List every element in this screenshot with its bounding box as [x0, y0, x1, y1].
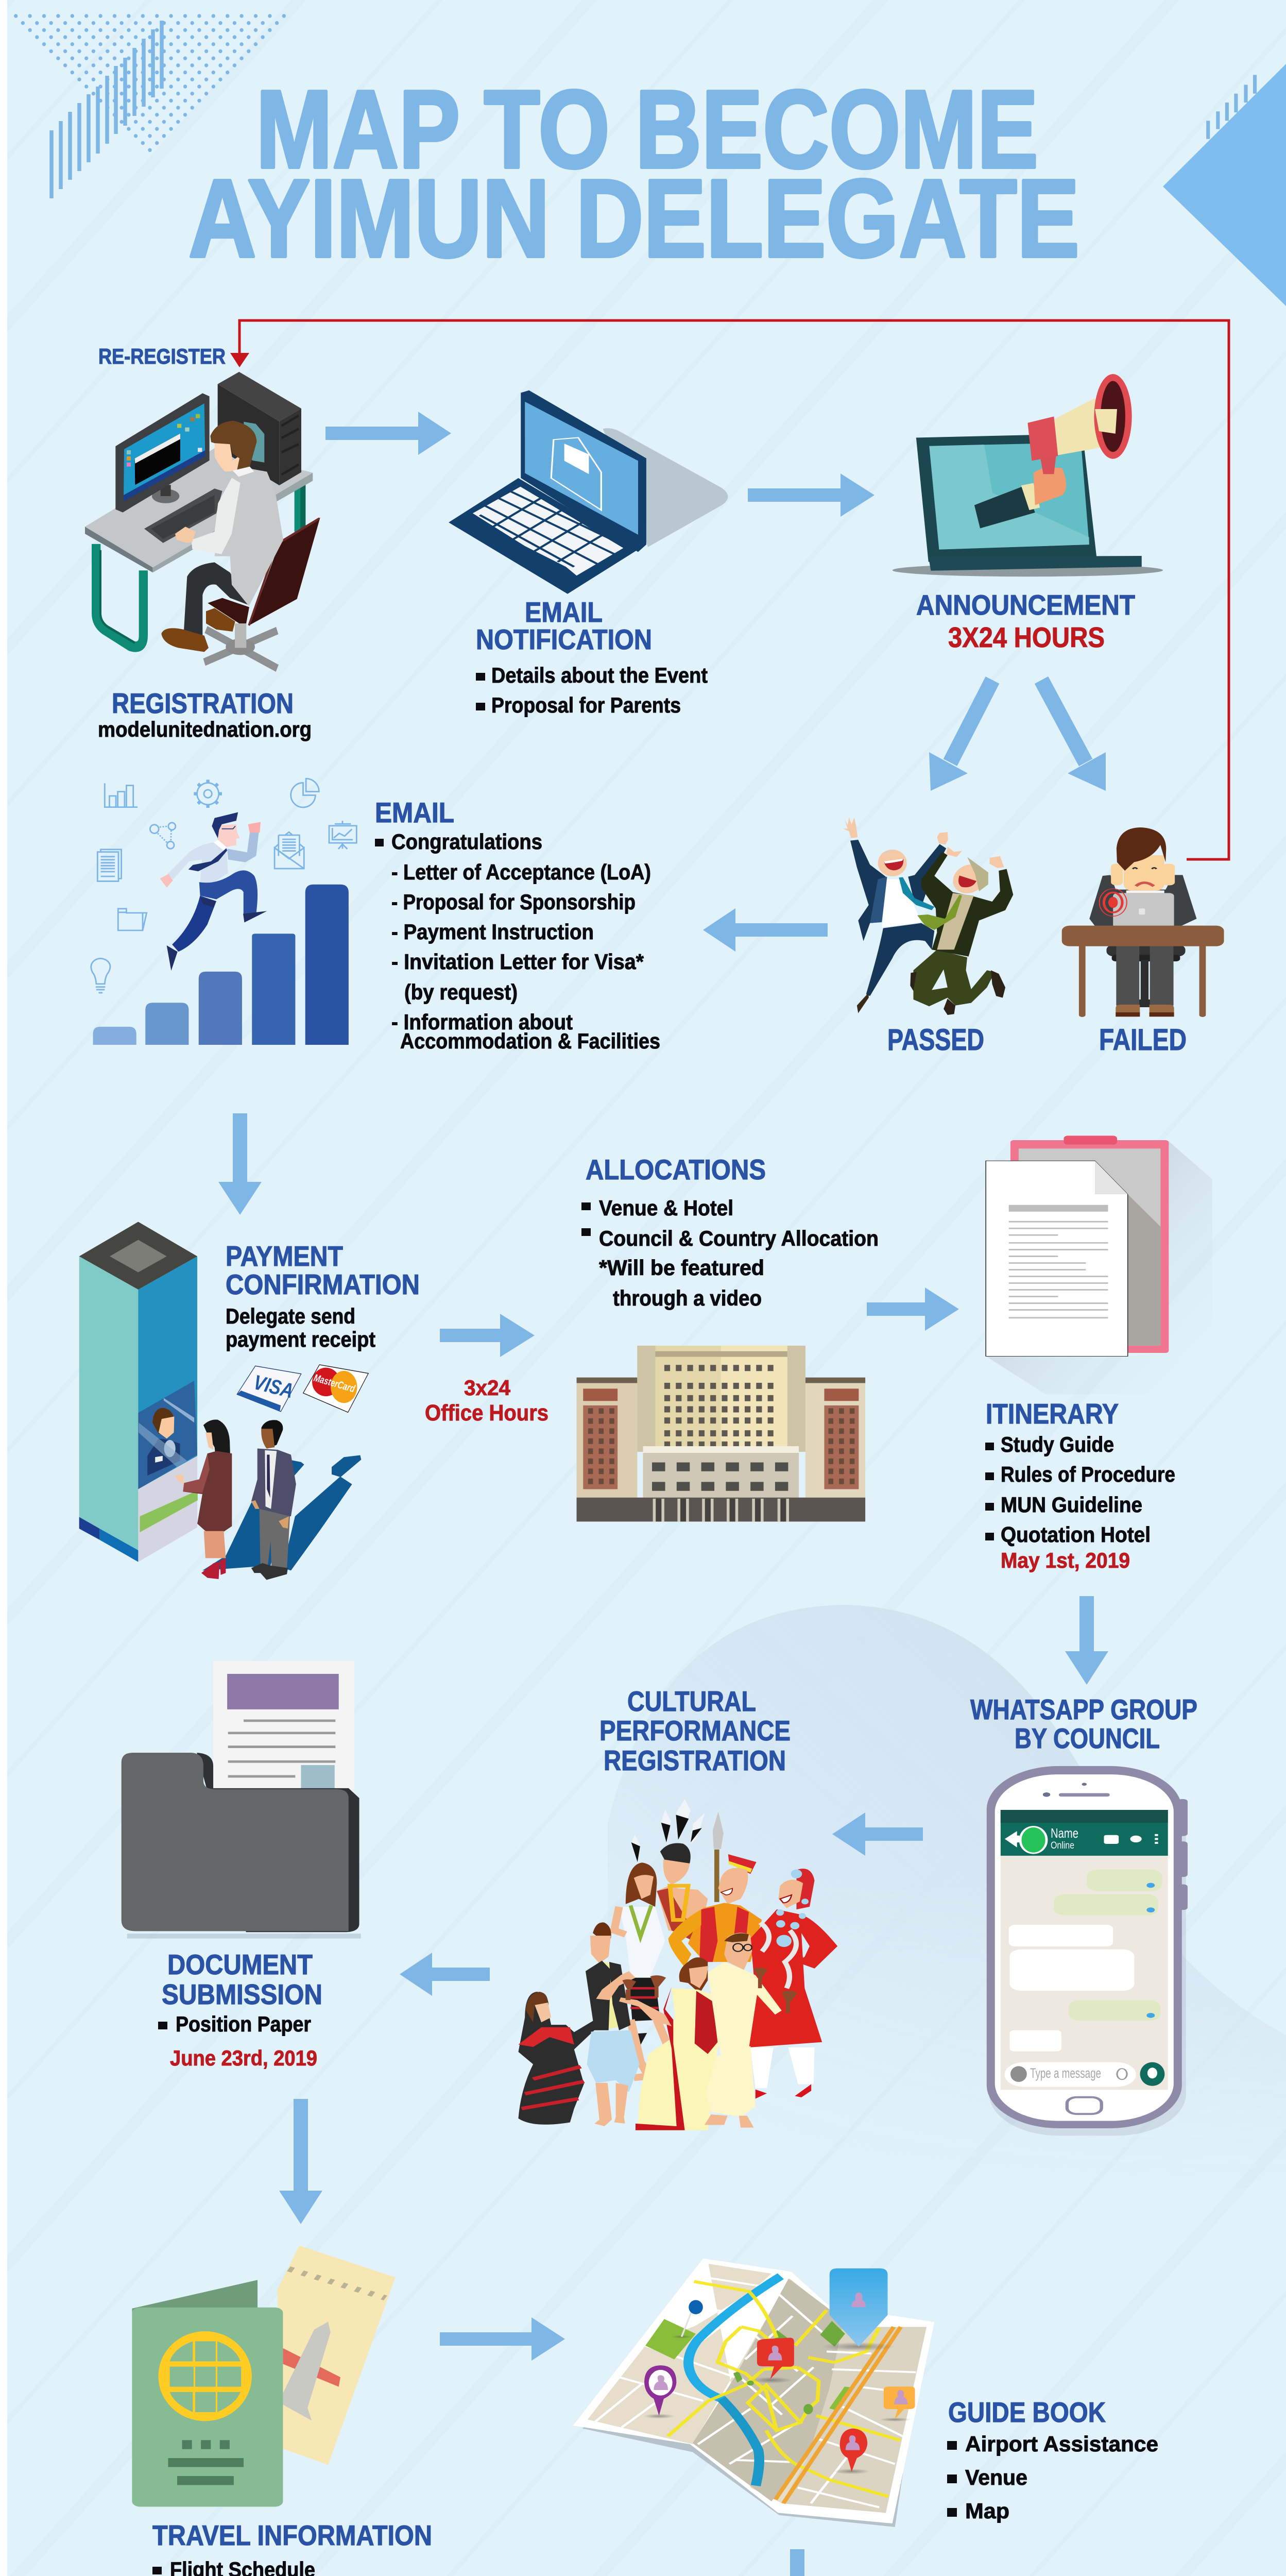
arrow — [325, 412, 451, 455]
callout: office hours — [425, 1376, 548, 1426]
card labels: VISA — [251, 1371, 296, 1403]
heading: email panel text: - Proposal for Sponsorship — [391, 890, 636, 914]
icon: people in traditional costume — [518, 1799, 837, 2130]
icon: payment kiosk with people — [79, 1222, 368, 1580]
title — [188, 67, 1079, 280]
heading: guide book: Venue — [965, 2465, 1027, 2489]
card labels — [251, 1371, 356, 1403]
heading: document submission — [158, 1948, 322, 2070]
heading: itinerary — [985, 1398, 1175, 1572]
arrow — [748, 473, 875, 517]
icon: folder with documents — [122, 1661, 361, 1939]
heading: email panel text: - Invitation Letter for Visa* — [391, 950, 644, 974]
heading: email panel text: - Payment Instruction — [391, 920, 594, 944]
label: re-register: RE-REGISTER — [98, 344, 226, 368]
callout: office hours: 3x24 — [464, 1376, 511, 1400]
heading: itinerary: May 1st, 2019 — [1001, 1548, 1130, 1572]
arrow — [867, 1287, 959, 1331]
heading: allocations: Council & Country Allocation — [599, 1226, 879, 1250]
heading: cultural performance registration: PERFORMANCE — [599, 1715, 791, 1747]
heading: email panel text: - Letter of Acceptance (LoA) — [391, 860, 651, 884]
heading: guide book — [947, 2396, 1158, 2523]
heading: payment confirmation: Delegate send — [226, 1304, 355, 1328]
icon: hotel building — [577, 1346, 865, 1521]
heading: email notification: Proposal for Parents — [491, 693, 681, 717]
arrow — [440, 1314, 535, 1357]
heading: payment confirmation — [226, 1240, 420, 1351]
heading: document submission: SUBMISSION — [162, 1978, 322, 2010]
heading: whatsapp group — [970, 1693, 1197, 1754]
arrow — [279, 2099, 322, 2224]
heading: document submission: Position Paper — [176, 2012, 311, 2036]
phone screen labels: Type a message — [1030, 2065, 1101, 2081]
re-register loop line — [230, 320, 1229, 859]
arrow — [218, 1113, 262, 1215]
card labels: MasterCard — [313, 1372, 356, 1395]
arrow — [440, 2317, 565, 2361]
decoration: top-left dotted triangle and bars — [9, 12, 290, 198]
icon: laptop with megaphone — [893, 374, 1163, 577]
arrow — [1065, 1596, 1108, 1685]
phone screen labels: Name — [1051, 1825, 1078, 1841]
arrow: to failed — [1041, 680, 1106, 791]
icon: passport and ticket — [132, 2246, 396, 2507]
heading: email notification: NOTIFICATION — [476, 623, 652, 655]
heading: cultural performance registration — [599, 1685, 791, 1776]
phone screen labels — [1030, 1825, 1101, 2081]
heading: email panel text: EMAIL — [375, 796, 454, 828]
heading: registration: modelunitednation.org — [98, 717, 312, 741]
title: MAP TO BECOME — [256, 67, 1038, 191]
heading: announcement — [916, 589, 1135, 653]
icon: man climbing bar chart — [91, 778, 356, 1045]
heading: email panel text: Congratulations — [391, 829, 542, 854]
icon: laptop with email — [449, 391, 728, 594]
icon: failed man at desk — [1062, 827, 1224, 1017]
heading: itinerary: Study Guide — [1001, 1432, 1114, 1456]
icon: passed men jumping — [843, 818, 1013, 1015]
heading: guide book: GUIDE BOOK — [948, 2396, 1106, 2428]
heading: allocations — [581, 1154, 879, 1310]
heading: registration: REGISTRATION — [112, 687, 294, 719]
heading: payment confirmation: payment receipt — [226, 1327, 375, 1351]
heading: whatsapp group: WHATSAPP GROUP — [970, 1693, 1197, 1725]
arrow — [703, 908, 828, 952]
heading: email notification: EMAIL — [525, 596, 603, 628]
phone screen labels: Online — [1051, 1840, 1074, 1851]
heading: registration — [98, 687, 312, 741]
heading: travel information: TRAVEL INFORMATION — [152, 2519, 432, 2551]
heading: email panel text — [375, 796, 660, 1053]
icon: phone with chat — [987, 1766, 1188, 2136]
heading: itinerary: ITINERARY — [986, 1398, 1119, 1430]
arrow — [832, 1812, 923, 1856]
title: AYIMUN DELEGATE — [188, 156, 1079, 280]
heading: allocations: *Will be featured — [599, 1256, 764, 1280]
heading: announcement: ANNOUNCEMENT — [916, 589, 1135, 621]
heading: payment confirmation: PAYMENT — [226, 1240, 343, 1272]
heading: itinerary: MUN Guideline — [1001, 1493, 1142, 1517]
heading: email panel text: (by request) — [404, 980, 518, 1004]
heading: allocations: Venue & Hotel — [599, 1196, 733, 1220]
heading: travel information — [152, 2519, 432, 2576]
heading: email notification — [476, 596, 708, 717]
heading: cultural performance registration: CULTURAL — [627, 1685, 756, 1717]
arrow — [776, 2549, 819, 2576]
label: passed: PASSED — [887, 1023, 984, 1057]
heading: payment confirmation: CONFIRMATION — [226, 1268, 420, 1300]
icon: city map with pins — [573, 2259, 934, 2527]
arrow: to passed — [929, 680, 992, 791]
heading: whatsapp group: BY COUNCIL — [1015, 1722, 1160, 1754]
icon: clipboard with document — [986, 1136, 1212, 1394]
decoration: top-right triangle and bars — [1163, 64, 1286, 306]
heading: announcement: 3X24 HOURS — [948, 621, 1105, 653]
callout: office hours: Office Hours — [425, 1400, 548, 1426]
heading: itinerary: Rules of Procedure — [1001, 1462, 1175, 1486]
heading: email notification: Details about the Event — [491, 663, 708, 687]
heading: cultural performance registration: REGISTRATION — [604, 1744, 786, 1776]
heading: guide book: Airport Assistance — [965, 2432, 1158, 2456]
heading: email panel text: - Information about — [391, 1010, 573, 1034]
heading: document submission: DOCUMENT — [167, 1948, 313, 1980]
heading: itinerary: Quotation Hotel — [1001, 1522, 1151, 1547]
arrow — [400, 1953, 490, 1996]
heading: allocations: through a video — [613, 1286, 762, 1310]
heading: allocations: ALLOCATIONS — [586, 1154, 766, 1185]
icon: person at computer — [85, 372, 320, 668]
heading: guide book: Map — [965, 2499, 1009, 2523]
label: failed: FAILED — [1099, 1023, 1187, 1057]
heading: document submission: June 23rd, 2019 — [170, 2046, 317, 2070]
heading: email panel text: Accommodation & Facilities — [400, 1029, 660, 1053]
